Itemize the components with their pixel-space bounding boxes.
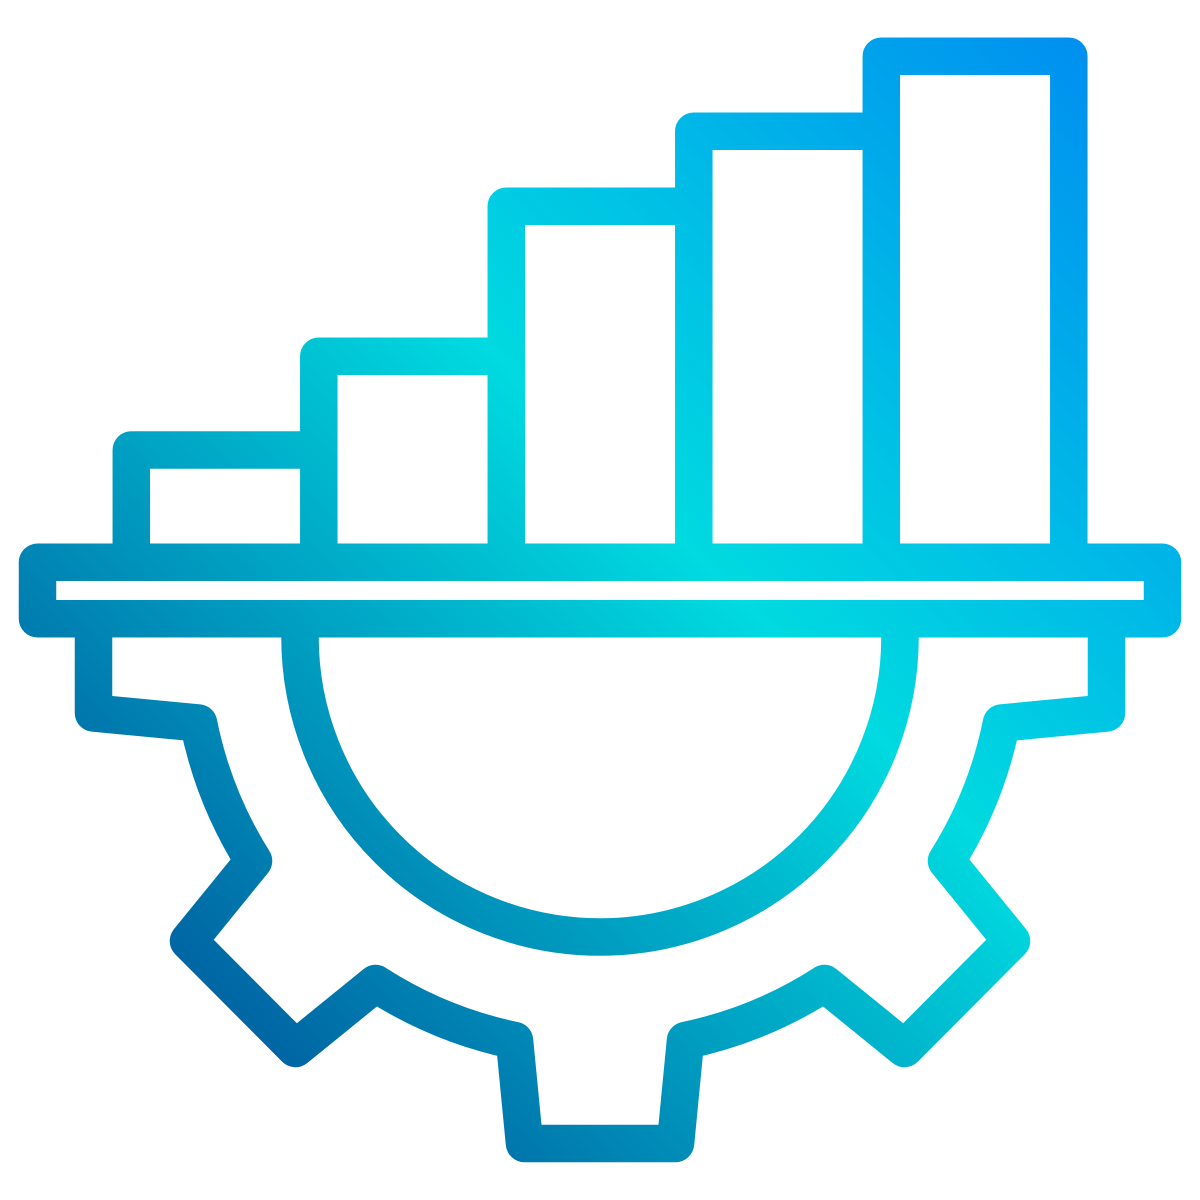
bar 3 [506, 206, 694, 562]
bar 4 [694, 131, 881, 562]
bar 5 [881, 56, 1069, 562]
bar chart: five rising bars [131, 56, 1069, 562]
gear outline with teeth [94, 637, 1106, 1144]
bar 2 [319, 356, 506, 562]
inner half circle of gear [300, 637, 900, 937]
bar 1 [131, 450, 319, 562]
shelf platform [38, 562, 1162, 619]
